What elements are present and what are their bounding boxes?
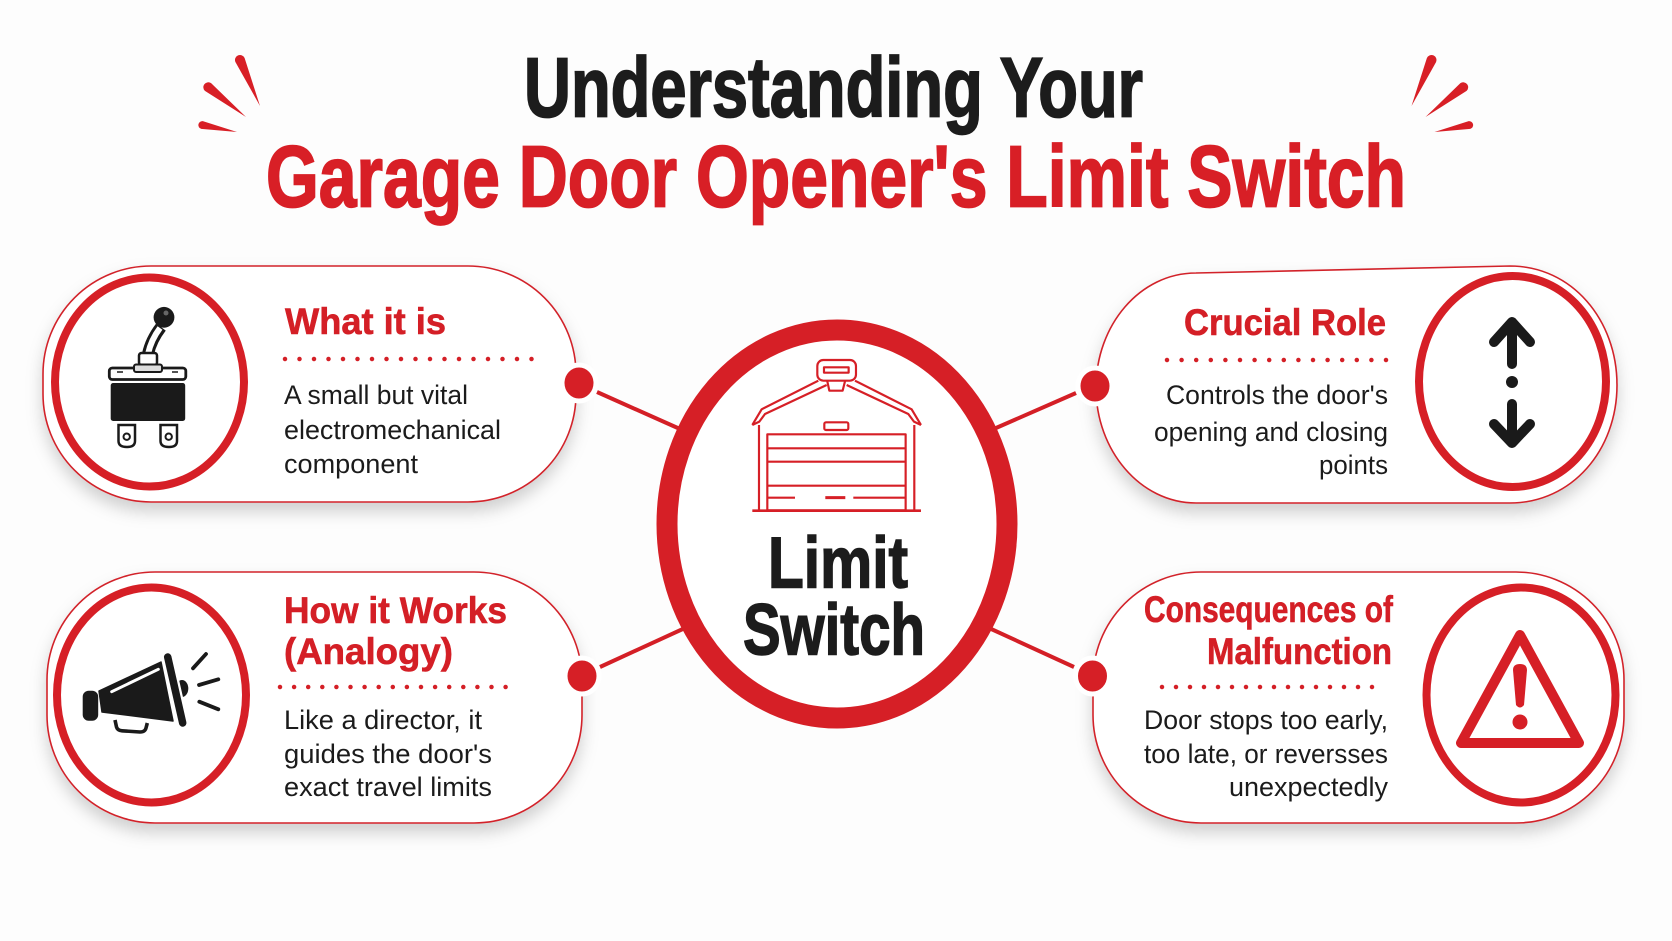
connector lines xyxy=(597,392,1076,667)
connector node xyxy=(1078,368,1112,404)
body text: what it is xyxy=(284,380,501,479)
connector node xyxy=(562,365,596,401)
dotted divider xyxy=(1162,685,1386,689)
heading: consequences of malfunction: Consequences of xyxy=(1144,589,1394,630)
title line 1: Understanding Your xyxy=(524,40,1143,134)
icon: right title burst xyxy=(1412,55,1473,132)
connector node xyxy=(1076,658,1110,694)
icon: up and down arrows xyxy=(1494,322,1530,443)
icon ring: megaphone xyxy=(57,588,246,802)
body text: consequences of malfunction: too late, or reversses xyxy=(1144,739,1388,769)
heading: consequences of malfunction: Malfunction xyxy=(1207,631,1392,672)
panel: what it is xyxy=(43,266,596,502)
title xyxy=(266,40,1406,226)
hub ring xyxy=(667,330,1007,718)
central hub: limit switch xyxy=(667,330,1007,718)
panel: how it works xyxy=(47,572,599,823)
heading: what it is: What it is xyxy=(285,301,446,342)
body text: crucial role xyxy=(1154,380,1388,480)
dotted divider xyxy=(1167,358,1386,362)
icon ring: toggle switch xyxy=(55,278,244,486)
body text: what it is: electromechanical xyxy=(284,415,501,445)
body text: what it is: component xyxy=(284,449,419,479)
hub label: Limit xyxy=(768,524,908,604)
body text: crucial role: opening and closing xyxy=(1154,417,1388,447)
icon ring: arrows xyxy=(1419,276,1606,487)
body text: how it works xyxy=(284,705,492,802)
body text: consequences of malfunction: Door stops too early, xyxy=(1144,705,1388,735)
body text: consequences of malfunction xyxy=(1144,705,1389,802)
heading: crucial role: Crucial Role xyxy=(1184,302,1386,343)
icon: left title burst xyxy=(198,55,260,132)
icon: megaphone xyxy=(83,654,218,732)
body text: what it is: A small but vital xyxy=(284,380,468,410)
connector node xyxy=(565,658,599,694)
panel: consequences of malfunction xyxy=(1076,572,1624,823)
body text: crucial role: points xyxy=(1319,450,1388,480)
heading: how it works: How it Works xyxy=(284,590,507,631)
heading: how it works: (Analogy) xyxy=(284,631,453,672)
heading: how it works xyxy=(284,590,507,672)
body text: how it works: exact travel limits xyxy=(284,772,492,802)
dotted divider xyxy=(285,357,532,361)
body text: how it works: guides the door's xyxy=(284,739,492,769)
icon: toggle switch xyxy=(109,307,186,447)
panel: crucial role xyxy=(1078,266,1617,503)
body text: crucial role: Controls the door's xyxy=(1166,380,1388,410)
hub label: Switch xyxy=(743,590,925,670)
body text: consequences of malfunction: unexpectedly xyxy=(1229,772,1389,802)
body text: how it works: Like a director, it xyxy=(284,705,483,735)
icon ring: warning xyxy=(1426,588,1616,802)
icon: warning triangle xyxy=(1461,635,1579,743)
hub label xyxy=(743,524,925,670)
icon: garage door with opener xyxy=(752,360,921,511)
heading: consequences of malfunction xyxy=(1144,589,1394,672)
dotted divider xyxy=(280,685,506,689)
